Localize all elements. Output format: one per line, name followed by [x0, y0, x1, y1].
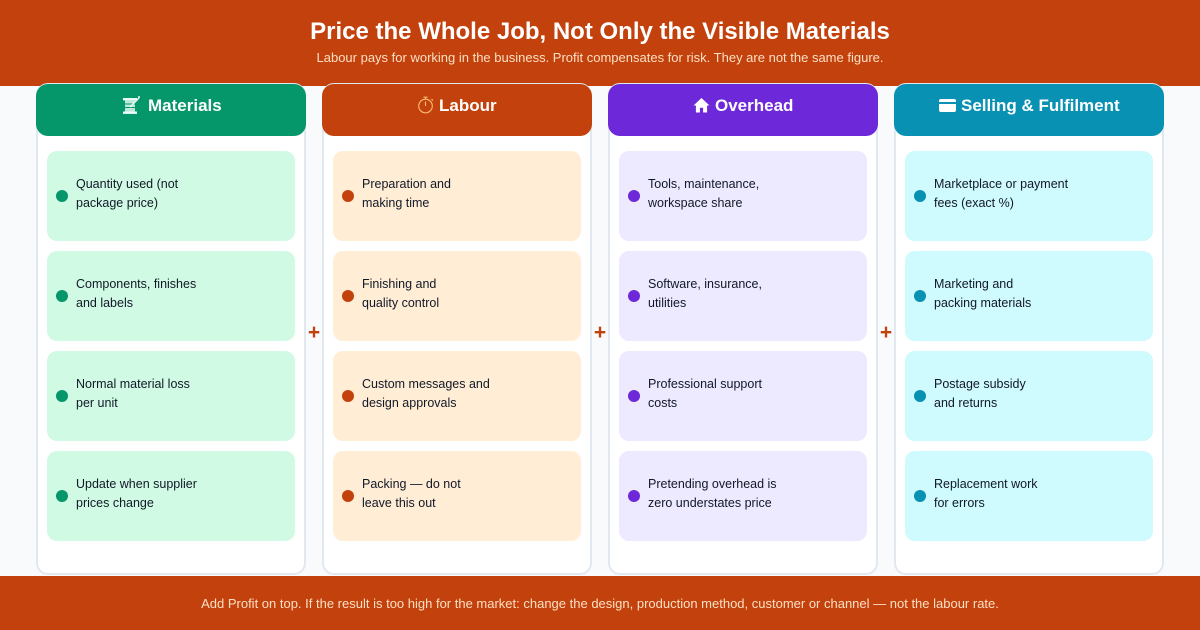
item: professional support: Professional support [648, 377, 762, 391]
item: components: and labels [76, 296, 133, 310]
icon: payment card [939, 99, 956, 112]
item: tools: workspace share [648, 196, 742, 210]
item: replacement [905, 451, 1153, 541]
item: replacement: Replacement work [934, 477, 1038, 491]
item: supplier prices: prices change [76, 496, 154, 510]
item: material loss [47, 351, 295, 441]
item: pretending: Pretending overhead is [648, 477, 777, 491]
item: custom messages: design approvals [362, 396, 457, 410]
item: marketing [905, 251, 1153, 341]
item: tools: Tools, maintenance, [648, 177, 759, 191]
plus sign 1: + [308, 321, 320, 344]
plus sign 3: + [880, 321, 892, 344]
item: quantity used: Quantity used (not [76, 177, 178, 191]
item: supplier prices [47, 451, 295, 541]
item: preparation: Preparation and [362, 177, 451, 191]
title: Price the Whole Job, Not Only the Visible Materials [310, 18, 890, 45]
item: pretending: zero understates price [648, 496, 772, 510]
item: supplier prices: Update when supplier [76, 477, 197, 491]
item: tools [619, 151, 867, 241]
item: professional support: costs [648, 396, 677, 410]
item: packing: Packing — do not [362, 477, 461, 491]
item: finishing: quality control [362, 296, 439, 310]
item: fees [905, 151, 1153, 241]
heading: labour [322, 84, 592, 136]
item: preparation [333, 151, 581, 241]
icon: thread spool and needle [123, 96, 140, 114]
item: professional support [619, 351, 867, 441]
item: software: utilities [648, 296, 686, 310]
footer band [0, 576, 1200, 630]
item: pretending [619, 451, 867, 541]
item: finishing [333, 251, 581, 341]
item: marketing: Marketing and [934, 277, 1013, 291]
panel: overhead [608, 83, 878, 575]
item: fees: Marketplace or payment [934, 177, 1068, 191]
heading: overhead: Overhead [715, 96, 793, 115]
item: software [619, 251, 867, 341]
item: postage: Postage subsidy [934, 377, 1026, 391]
item: postage [905, 351, 1153, 441]
plus sign 2: + [594, 321, 606, 344]
item: custom messages [333, 351, 581, 441]
heading: overhead [608, 84, 878, 136]
item: packing: leave this out [362, 496, 436, 510]
panel: selling and fulfilment [894, 83, 1164, 575]
item: components: Components, finishes [76, 277, 196, 291]
heading: materials: Materials [148, 96, 222, 115]
heading: selling and fulfilment [894, 84, 1164, 136]
item: quantity used: package price) [76, 196, 158, 210]
header band [0, 0, 1200, 86]
item: fees: fees (exact %) [934, 196, 1014, 210]
icon: house [694, 98, 710, 112]
item: packing [333, 451, 581, 541]
heading: labour: Labour [439, 96, 497, 115]
item: software: Software, insurance, [648, 277, 762, 291]
item: finishing: Finishing and [362, 277, 436, 291]
item: components [47, 251, 295, 341]
heading: selling and fulfilment: Selling & Fulfilment [961, 96, 1120, 115]
heading: materials [36, 84, 306, 136]
subtitle: Labour pays for working in the business. Profit compensates for risk. They are not the same figure. [316, 50, 884, 65]
item: custom messages: Custom messages and [362, 377, 490, 391]
item: preparation: making time [362, 196, 429, 210]
item: postage: and returns [934, 396, 997, 410]
item: marketing: packing materials [934, 296, 1031, 310]
item: material loss: per unit [76, 396, 118, 410]
icon: stopwatch [418, 96, 434, 114]
item: material loss: Normal material loss [76, 377, 190, 391]
footer band: Add Profit on top. If the result is too high for the market: change the design, production method, customer or channel — not the labour rate. [201, 596, 999, 611]
panel: labour [322, 83, 592, 575]
item: quantity used [47, 151, 295, 241]
item: replacement: for errors [934, 496, 985, 510]
panel: materials [36, 83, 306, 575]
